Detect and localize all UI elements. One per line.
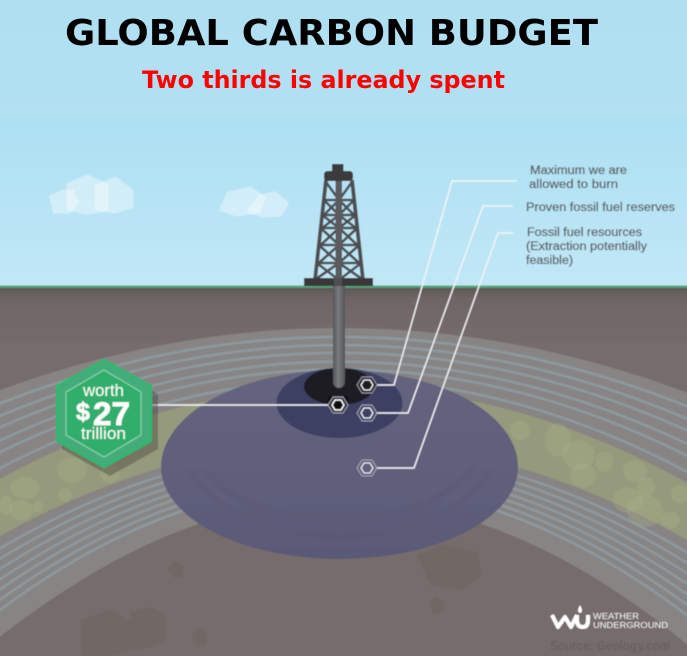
ground and soil [0, 287, 687, 656]
label: fossil fuel resources: Fossil fuel resources [527, 227, 642, 239]
oil reservoir: fossil fuel resources [161, 368, 518, 559]
weather underground logo [552, 605, 668, 630]
hexagon marker: reserves [357, 405, 377, 421]
reservoir shading arcs [190, 462, 490, 537]
callout labels [526, 165, 675, 267]
repair soil below the lower strata edge [0, 503, 687, 656]
source credit: Source: Geology.com [550, 639, 670, 653]
hexagon marker: maximum burn [357, 377, 377, 393]
clouds [52, 177, 286, 215]
green value badge: trillion [81, 424, 126, 443]
marker hexagons [328, 377, 377, 476]
sandstone pebbles [0, 420, 687, 528]
proven reserves ellipse [276, 368, 402, 438]
callout lines [152, 181, 517, 468]
hexagon marker: budget [328, 397, 348, 413]
label: fossil fuel resources: feasible) [526, 255, 573, 267]
dark rocks in soil [81, 545, 482, 656]
green value badge: worth [82, 381, 124, 400]
oil derrick tower [304, 164, 373, 286]
title: GLOBAL CARBON BUDGET [65, 13, 598, 54]
carbon budget ellipse [304, 368, 374, 405]
grass line [0, 286, 687, 288]
label: fossil fuel resources: (Extraction potentially [526, 241, 647, 253]
subtitle: Two thirds is already spent [142, 66, 505, 94]
label: maximum we are allowed to burn: Maximum we are [530, 165, 627, 177]
green value badge [57, 360, 158, 476]
label: fossil fuel resources [526, 227, 647, 267]
label: maximum we are allowed to burn: allowed to burn [529, 179, 618, 191]
sky [0, 0, 687, 286]
drill pipe [333, 286, 345, 388]
green value badge: 27 [93, 396, 130, 432]
weather underground logo: UNDERGROUND [593, 620, 668, 630]
label: maximum we are allowed to burn [529, 165, 627, 191]
strata stripes [0, 337, 687, 618]
hexagon marker: resources [357, 460, 377, 476]
yellow sandstone layer [0, 387, 687, 550]
weather underground logo: WEATHER [593, 611, 639, 621]
gray rock strata band [0, 328, 687, 656]
black square behind budget marker [328, 396, 348, 405]
label: proven fossil fuel reserves: Proven fossil fuel reserves [526, 202, 675, 214]
green value badge: $ [76, 398, 90, 426]
